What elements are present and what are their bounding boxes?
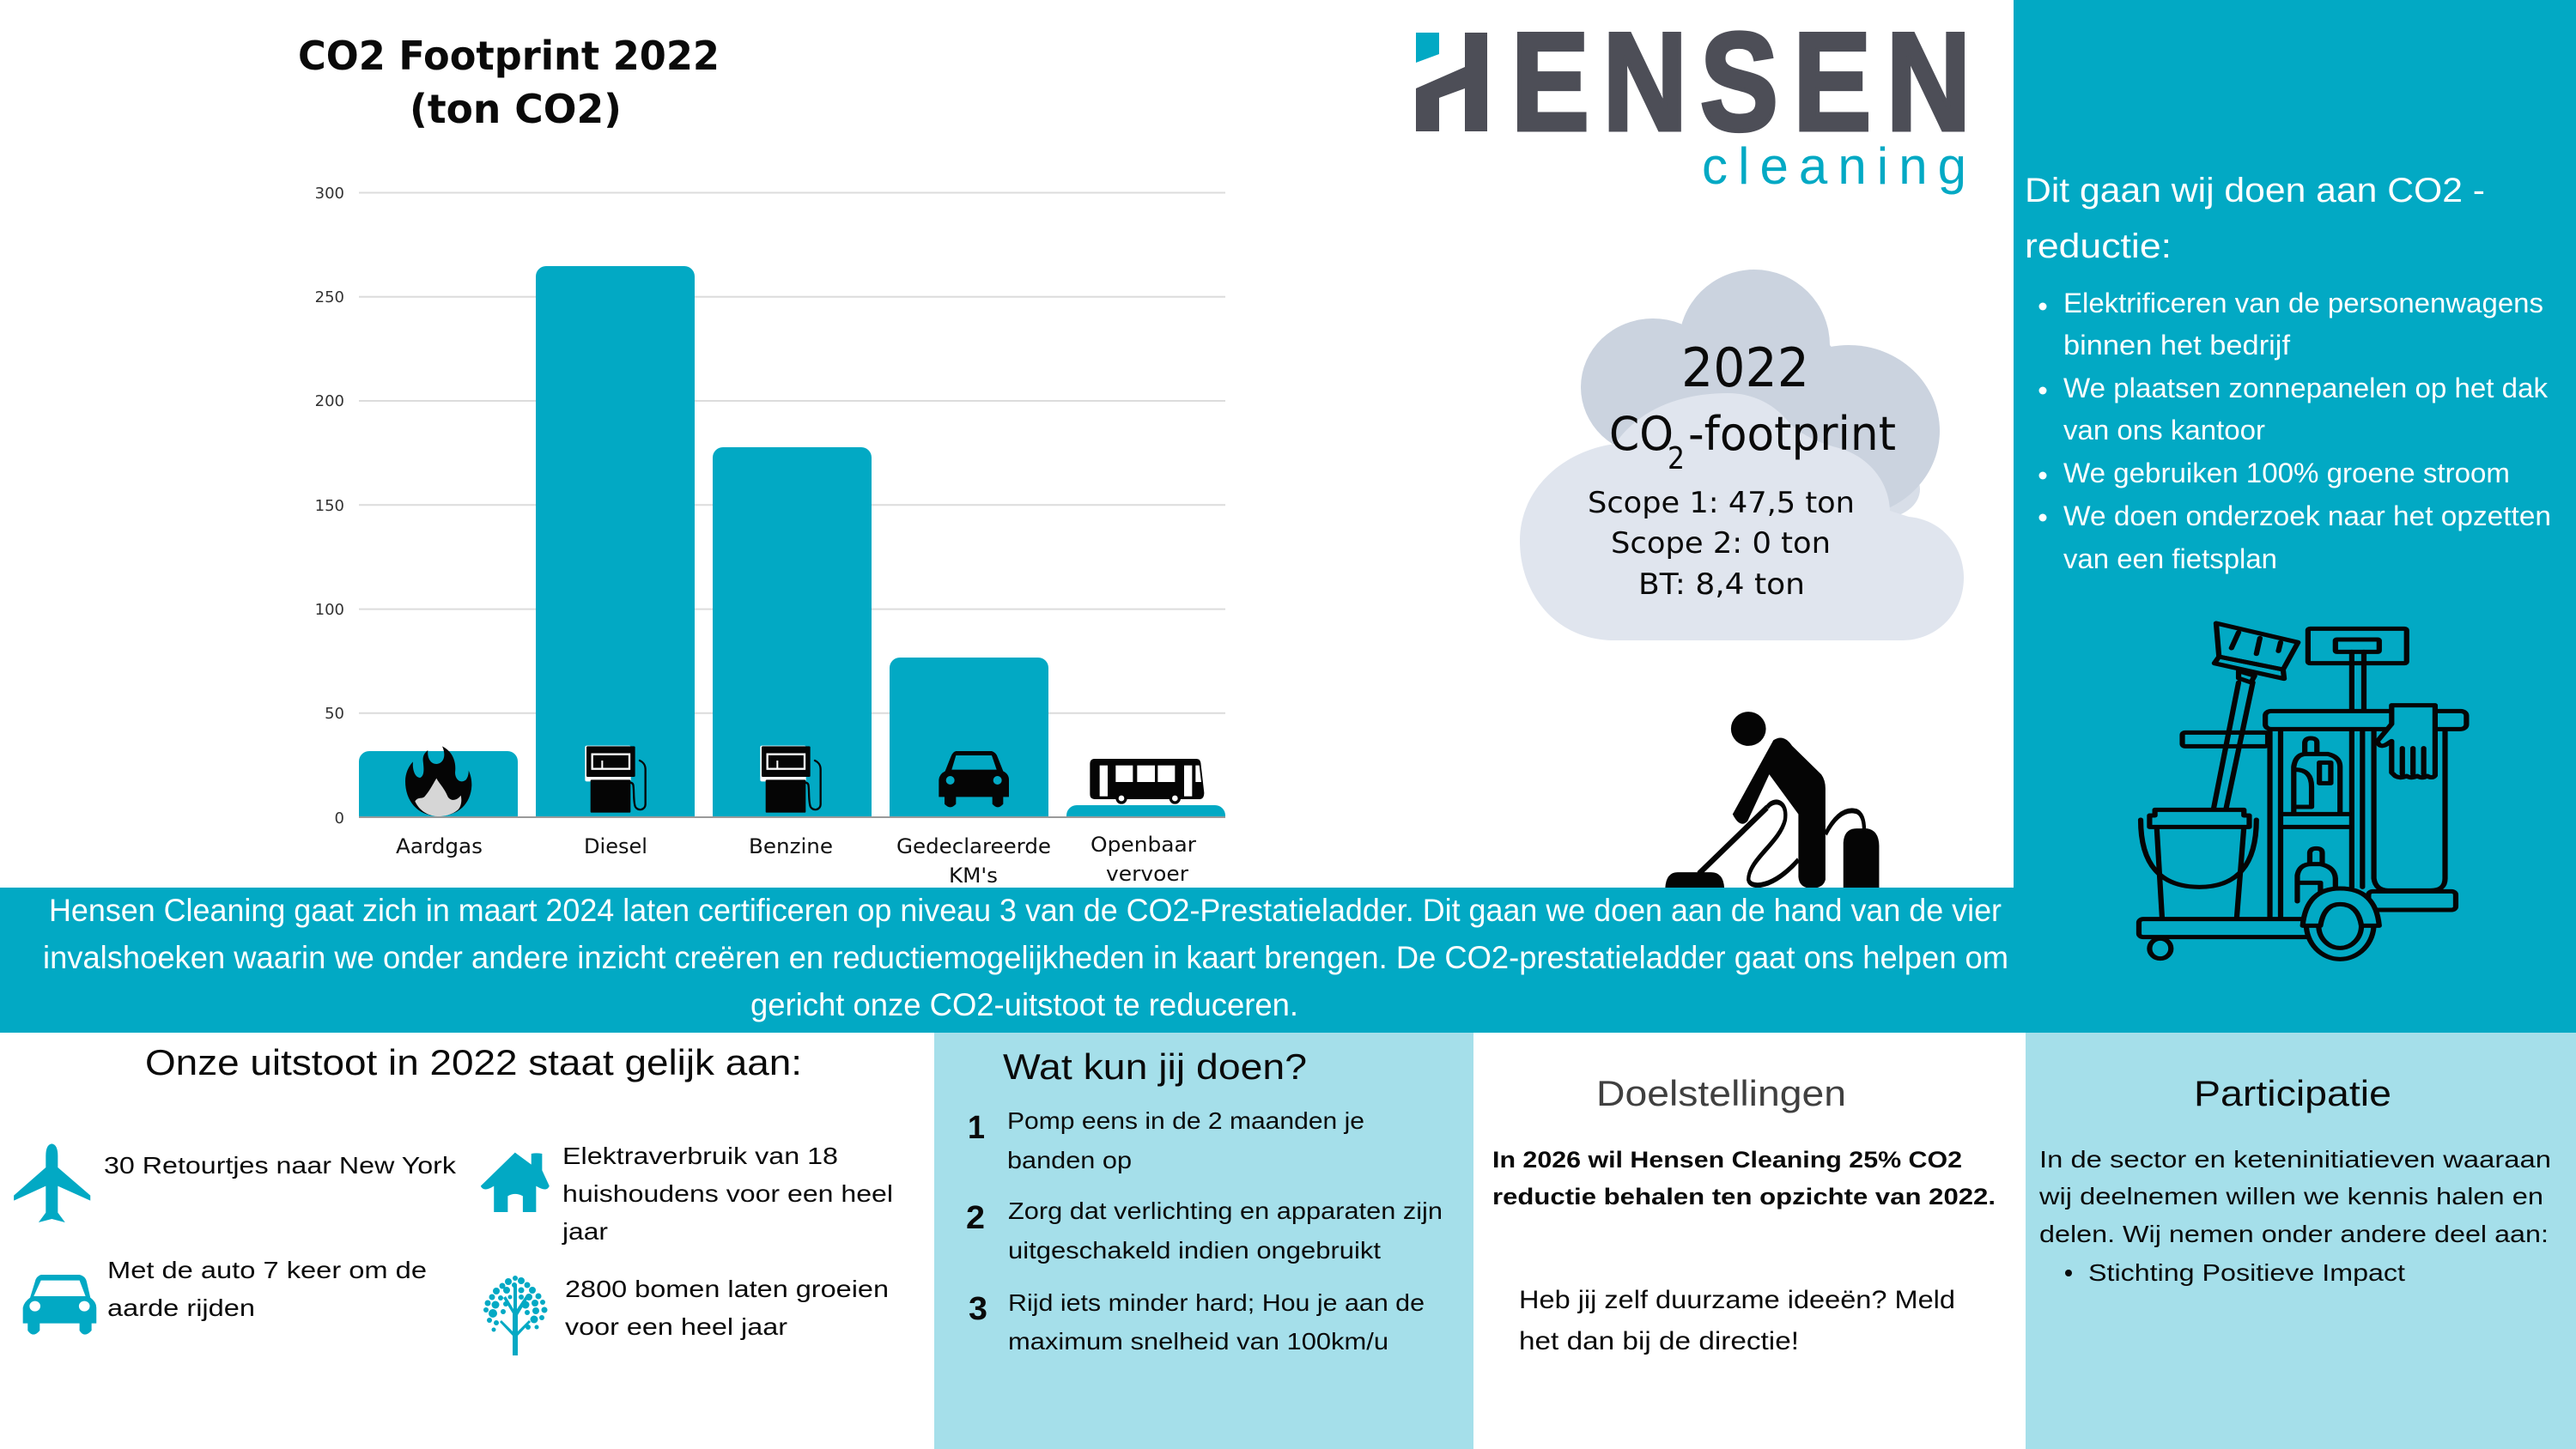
glove: [2378, 706, 2435, 778]
panel: goals: [1492, 1073, 1996, 1355]
icon: flame: [405, 746, 471, 816]
reduction bullet list: We gebruiken 100% groene stroom: [2063, 458, 2510, 488]
bar: Gedeclareerde KM's: [890, 658, 1048, 817]
heading: reduction: [2025, 172, 2485, 265]
tip 3: Rijd iets minder hard; Hou je aan de: [1008, 1289, 1425, 1316]
bar: Openbaar vervoer: [1066, 805, 1225, 817]
icon: cleaning cart: [2139, 623, 2466, 959]
heading: participation: Participatie: [2194, 1073, 2391, 1113]
call for ideas: Heb jij zelf duurzame ideeën? Meld: [1519, 1286, 1955, 1314]
y axis labels: 50: [325, 705, 344, 723]
tip 1: banden op: [1007, 1147, 1132, 1173]
equivalent: households: jaar: [562, 1218, 608, 1245]
back cloud: [1581, 270, 1940, 518]
y axis labels: 200: [315, 392, 344, 410]
chart title: (ton CO2): [410, 86, 622, 132]
y axis labels: 300: [315, 185, 344, 203]
cloud text: CO: [1609, 407, 1674, 461]
call for ideas: [1519, 1286, 1955, 1355]
category labels: Gedeclareerde: [896, 834, 1051, 858]
bar: Aardgas: [359, 751, 518, 817]
cloud text: -footprint: [1688, 407, 1896, 461]
banner: certification text: invalshoeken waarin we onder andere inzicht creëren en reductiemogelijkheden in kaart brengen. De CO2-prestatieladder gaat ons helpen om: [43, 940, 2008, 975]
icon: fuel pump (diesel): [585, 746, 646, 813]
equivalent: households: [562, 1143, 893, 1245]
equivalent: driving: [107, 1257, 427, 1321]
cloud text: BT: 8,4 ton: [1638, 567, 1805, 602]
call for ideas: het dan bij de directie!: [1519, 1327, 1799, 1355]
goal statement: reductie behalen ten opzichte van 2022.: [1492, 1184, 1996, 1210]
participation text: delen. Wij nemen onder andere deel aan:: [2039, 1221, 2549, 1247]
banner: certification text: [0, 888, 2014, 1033]
tip 1: Pomp eens in de 2 maanden je: [1007, 1107, 1364, 1134]
tip 2: [966, 1197, 1443, 1264]
cloud text: 2: [1668, 441, 1685, 476]
participation bullet: Stichting Positieve Impact: [2088, 1259, 2405, 1286]
tip 3: [969, 1289, 1425, 1355]
bar: Diesel: [536, 266, 695, 817]
heading: equivalents: Onze uitstoot in 2022 staat gelijk aan:: [145, 1042, 802, 1082]
equivalent: households: Elektraverbruik van 18: [562, 1143, 838, 1169]
tip 1: 1: [968, 1110, 985, 1146]
tip 2: uitgeschakeld indien ongebruikt: [1008, 1237, 1381, 1264]
category labels: vervoer: [1106, 862, 1188, 886]
y axis labels: 100: [315, 601, 344, 619]
bucket: [2157, 827, 2244, 917]
panel: what can you do: [934, 1033, 1473, 1449]
chart title: [298, 33, 720, 132]
equivalent: trees: voor een heel jaar: [565, 1313, 787, 1340]
panel: reduction measures: [2014, 0, 2576, 1033]
category labels: Aardgas: [396, 834, 483, 858]
icon: car small: [23, 1275, 96, 1335]
tip 2: 2: [966, 1200, 985, 1236]
goal statement: In 2026 wil Hensen Cleaning 25% CO2: [1492, 1147, 1962, 1173]
reduction bullet list: binnen het bedrijf: [2063, 330, 2290, 361]
panel: equivalents of emissions: [14, 1042, 893, 1355]
bar: Benzine: [713, 447, 872, 817]
frame: [2270, 729, 2362, 917]
icon: house: [481, 1153, 550, 1212]
y axis labels: 250: [315, 288, 344, 306]
equivalent: driving: aarde rijden: [107, 1294, 255, 1321]
reduction bullet list: Elektrificeren van de personenwagens: [2063, 288, 2543, 318]
cloud text: Scope 2: 0 ton: [1611, 526, 1831, 561]
bag: [2374, 730, 2445, 890]
icon: airplane: [14, 1143, 90, 1222]
panel: participation: [2026, 1033, 2576, 1449]
tip 2: Zorg dat verlichting en apparaten zijn: [1008, 1197, 1443, 1224]
lower trays and wheels: [2368, 891, 2456, 910]
banner: certification text: Hensen Cleaning gaat zich in maart 2024 laten certificeren op niveau 3 van de CO2-Prestatieladder. Dit gaan we doen aan de hand van de vier: [49, 893, 2002, 928]
cloud text: [1588, 336, 1896, 602]
y axis labels: 0: [335, 809, 344, 828]
cloud text: Scope 1: 47,5 ton: [1588, 486, 1855, 520]
participation text: [2038, 1146, 2551, 1247]
category labels: Diesel: [584, 834, 647, 858]
logo: Hensen cleaning: [1416, 4, 1971, 195]
icon: tree: [483, 1276, 548, 1355]
bar chart: [315, 185, 1225, 888]
broom: [2214, 682, 2253, 809]
reduction bullet list: van ons kantoor: [2063, 415, 2265, 446]
participation text: wij deelnemen willen we kennis halen en: [2038, 1183, 2543, 1210]
tip 3: 3: [969, 1291, 987, 1327]
y axis labels: 150: [315, 497, 344, 515]
banner: certification text: gericht onze CO2-uitstoot te reduceren.: [750, 987, 1298, 1022]
icon: car: [939, 751, 1009, 807]
top bottle: [2305, 738, 2317, 753]
equivalent: trees: [565, 1276, 889, 1340]
category labels: KM's: [949, 864, 998, 888]
icon: fuel pump (benzine): [760, 746, 821, 813]
equivalent: flights: 30 Retourtjes naar New York: [104, 1152, 457, 1179]
heading: what can you do: Wat kun jij doen?: [1003, 1046, 1307, 1087]
reduction bullet list: We plaatsen zonnepanelen op het dak: [2063, 373, 2549, 403]
heading: goals: Doelstellingen: [1596, 1073, 1846, 1113]
equivalent: driving: Met de auto 7 keer om de: [107, 1257, 427, 1283]
goal statement: [1492, 1147, 1996, 1210]
participation text: In de sector en keteninitiatieven waaraan: [2039, 1146, 2551, 1173]
logo: Hensen cleaning: ENSEN: [1511, 4, 1971, 160]
icon: person vacuuming: [1665, 712, 1879, 888]
category labels: Benzine: [749, 834, 833, 858]
cloud with footprint figures: [1520, 270, 1964, 640]
mop: [2308, 628, 2407, 664]
icon: bus: [1090, 759, 1204, 804]
reduction bullet list: We doen onderzoek naar het opzetten: [2063, 500, 2551, 531]
front cloud: [1520, 393, 1964, 640]
equivalent: households: huishoudens voor een heel: [562, 1180, 893, 1207]
heading: reduction: reductie:: [2025, 227, 2172, 265]
logo: Hensen cleaning: cleaning: [1702, 137, 1966, 195]
reduction bullet list: van een fietsplan: [2063, 543, 2277, 574]
category labels: [396, 833, 1196, 888]
equivalent: trees: 2800 bomen laten groeien: [565, 1276, 889, 1302]
chart title: CO2 Footprint 2022: [298, 33, 720, 79]
lower bottle: [2310, 848, 2322, 864]
tip 3: maximum snelheid van 100km/u: [1008, 1328, 1388, 1355]
y axis labels: [315, 185, 344, 828]
reduction bullet list: [2038, 288, 2551, 574]
tip 1: [968, 1107, 1364, 1173]
category labels: Openbaar: [1091, 833, 1196, 857]
cloud text: 2022: [1681, 336, 1809, 399]
heading: reduction: Dit gaan wij doen aan CO2 -: [2025, 172, 2485, 209]
